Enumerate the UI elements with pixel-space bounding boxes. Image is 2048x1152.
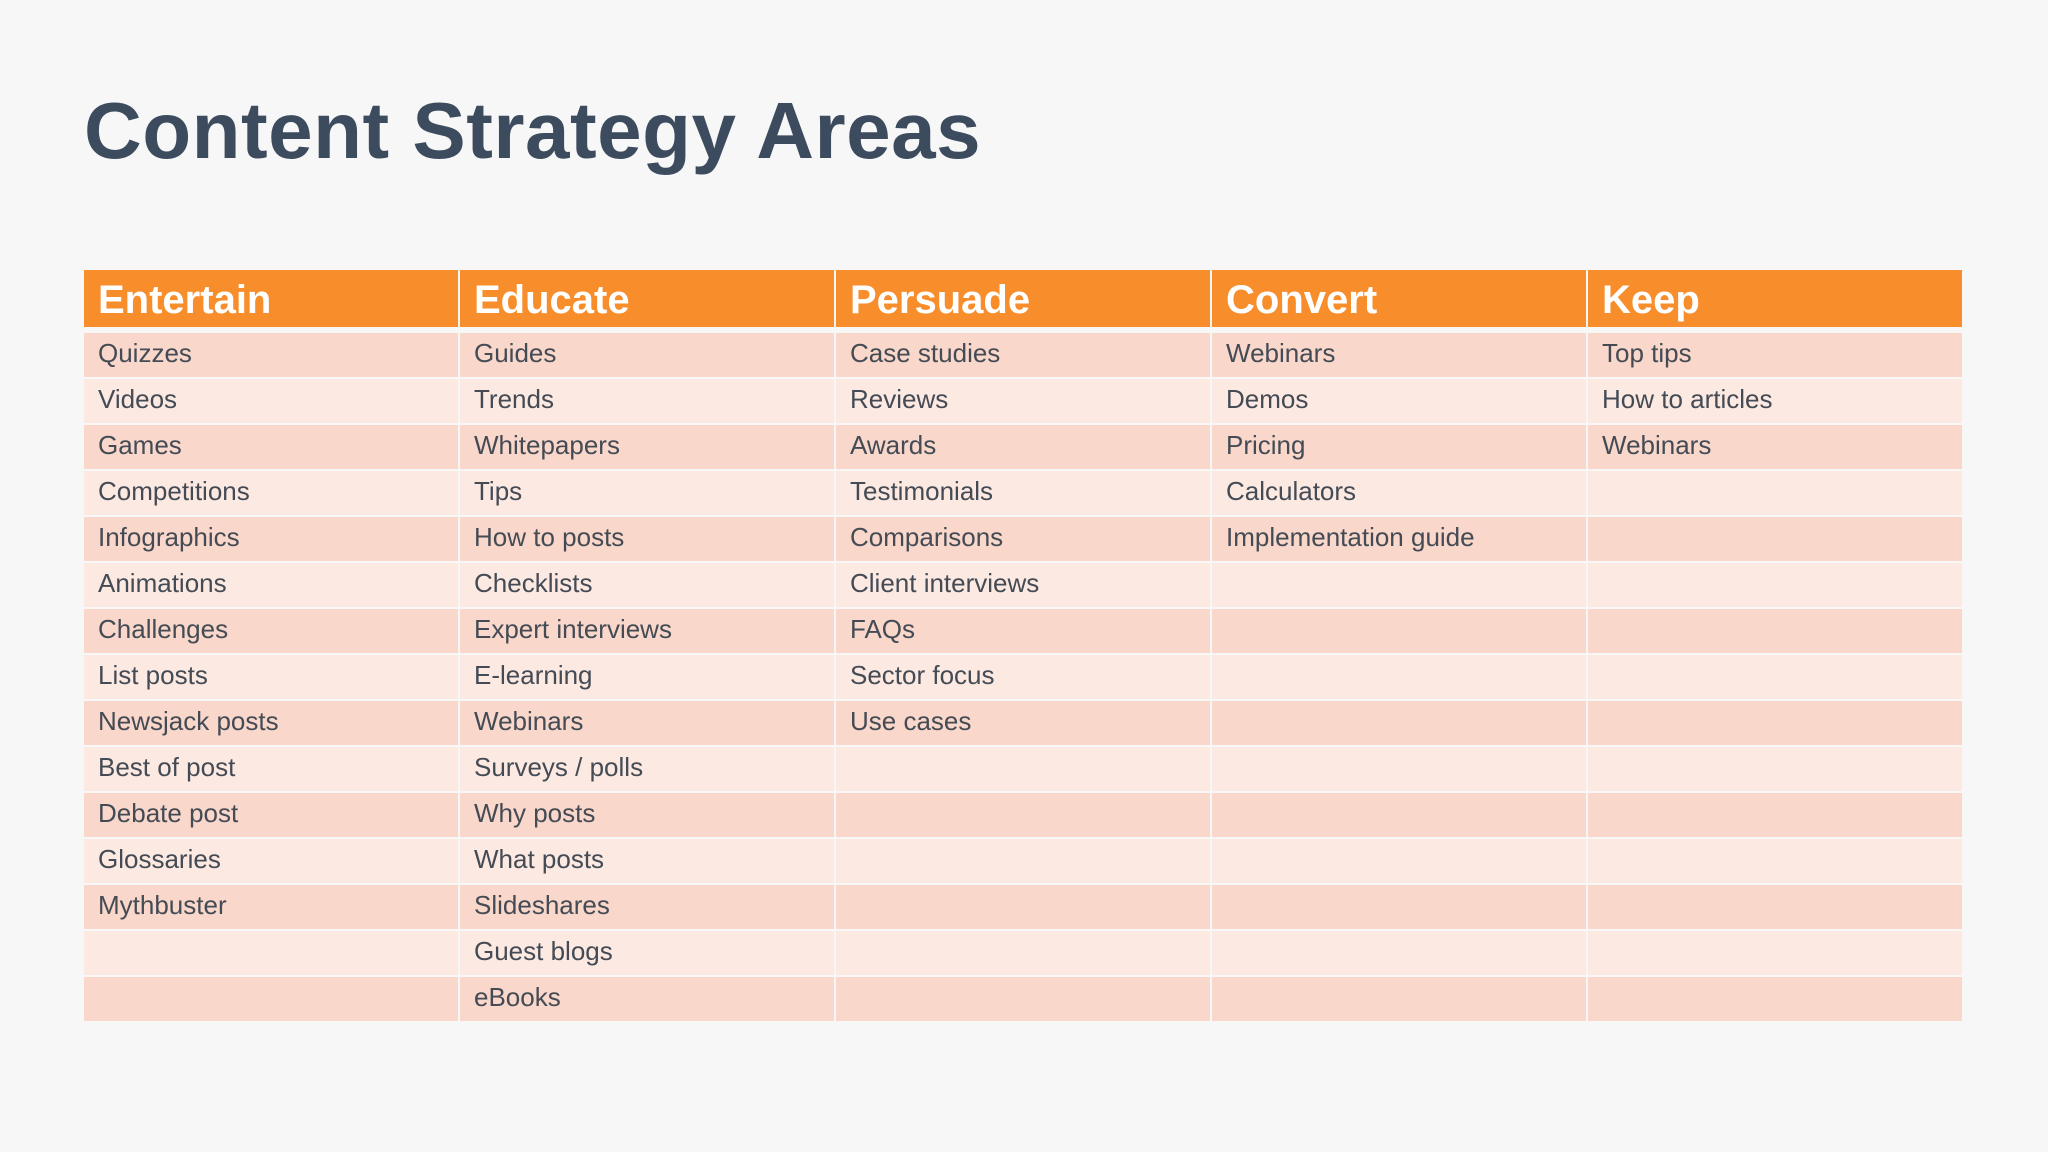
column: Keep: How to articles [1602, 384, 1772, 414]
column: Entertain [84, 270, 458, 1021]
column: Entertain: Entertain [98, 278, 271, 322]
column: Educate: How to posts [474, 522, 624, 552]
column: Entertain: Competitions [98, 476, 250, 506]
table [84, 270, 1962, 1021]
column: Keep: Keep [1602, 278, 1700, 322]
column: Convert: Demos [1226, 384, 1308, 414]
column: Convert [1212, 270, 1586, 1021]
column: Entertain: Mythbuster [98, 890, 227, 920]
column: Entertain: Challenges [98, 614, 228, 644]
column: Persuade: Client interviews [850, 568, 1039, 598]
column: Entertain: Debate post [98, 798, 238, 828]
column: Convert: Convert [1226, 278, 1377, 322]
column: Persuade: Use cases [850, 706, 971, 736]
column: Educate: Whitepapers [474, 430, 620, 460]
column: Keep: Top tips [1602, 338, 1692, 368]
column: Educate: What posts [474, 844, 604, 874]
column: Entertain: Videos [98, 384, 177, 414]
column: Convert: Pricing [1226, 430, 1305, 460]
column: Educate [460, 270, 834, 1021]
column: Persuade: Sector focus [850, 660, 995, 690]
column: Educate: Trends [474, 384, 554, 414]
column: Entertain: Newsjack posts [98, 706, 279, 736]
column: Entertain: Quizzes [98, 338, 192, 368]
column: Educate: Guest blogs [474, 936, 613, 966]
column: Entertain: Best of post [98, 752, 235, 782]
column: Convert: Webinars [1226, 338, 1335, 368]
column: Persuade [836, 270, 1210, 1021]
column: Educate: Webinars [474, 706, 583, 736]
column: Convert: Calculators [1226, 476, 1356, 506]
column: Persuade: Comparisons [850, 522, 1003, 552]
column: Persuade: Awards [850, 430, 936, 460]
column: Educate: Slideshares [474, 890, 610, 920]
column: Educate: Checklists [474, 568, 592, 598]
column: Entertain: Glossaries [98, 844, 221, 874]
column: Persuade: Persuade [850, 278, 1030, 322]
column: Educate: Guides [474, 338, 556, 368]
column: Entertain: List posts [98, 660, 208, 690]
column: Persuade: FAQs [850, 614, 915, 644]
column: Persuade: Reviews [850, 384, 948, 414]
column: Educate: Tips [474, 476, 522, 506]
column: Educate: Expert interviews [474, 614, 672, 644]
column: Convert: Implementation guide [1226, 522, 1475, 552]
column: Keep [1588, 270, 1962, 1021]
column: Educate: E-learning [474, 660, 593, 690]
column: Entertain: Animations [98, 568, 227, 598]
column: Educate: Why posts [474, 798, 595, 828]
column: Persuade: Testimonials [850, 476, 993, 506]
column: Keep: Webinars [1602, 430, 1711, 460]
column: Educate: Surveys / polls [474, 752, 643, 782]
column: Educate: eBooks [474, 982, 561, 1012]
title: Content Strategy Areas [84, 86, 981, 175]
column: Persuade: Case studies [850, 338, 1000, 368]
column: Entertain: Infographics [98, 522, 240, 552]
column: Entertain: Games [98, 430, 182, 460]
column: Educate: Educate [474, 278, 630, 322]
